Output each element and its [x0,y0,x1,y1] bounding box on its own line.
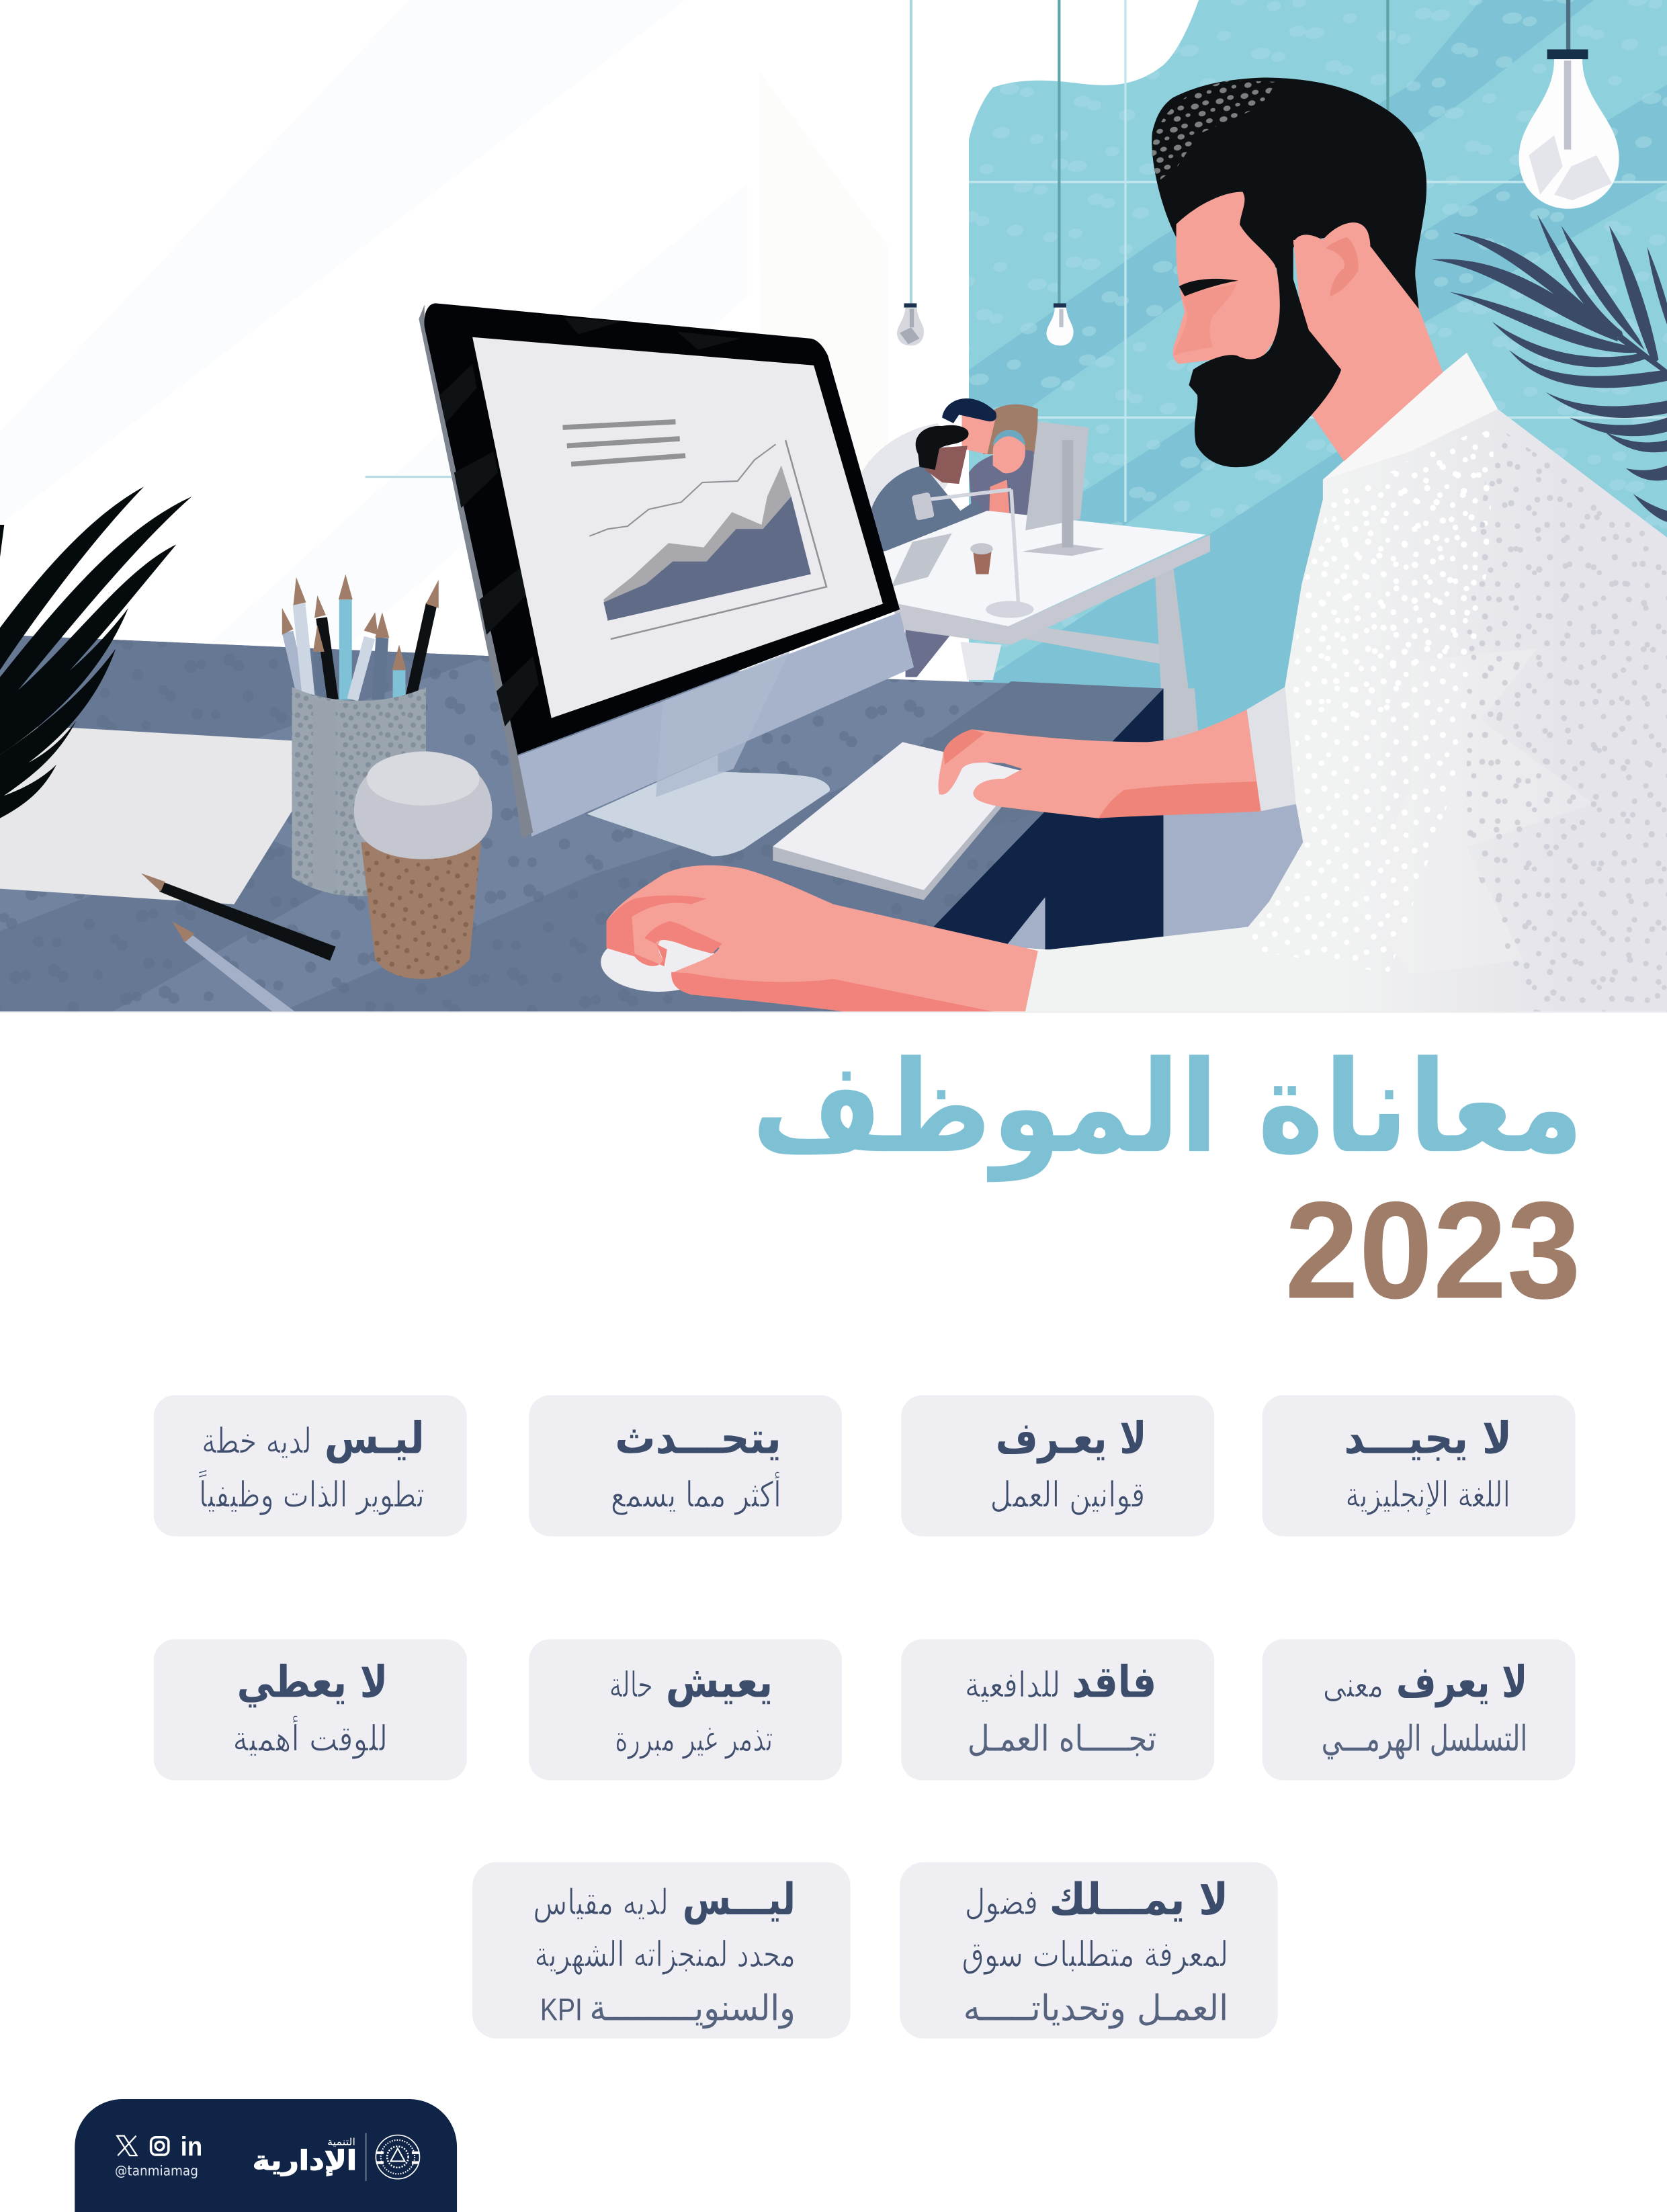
card: English [1263,1395,1576,1536]
card: curiosity: لمعرفة متطلبات سوق [962,1934,1228,1975]
shirt grey dots second layer [1467,423,1667,1011]
card: motivation: فاقد [1072,1658,1156,1708]
pencil grey blue [288,632,303,699]
paper [0,726,292,904]
monitor frame sheen [440,317,740,726]
table right leg [1155,567,1195,739]
icon: Instagram [151,2137,169,2155]
neck [1293,240,1443,462]
pencil black two [411,604,431,699]
wall window grid [969,0,1667,522]
light leg [1006,897,1045,949]
title: معاناة الموظف [752,1033,1584,1183]
small monitor [1025,422,1088,530]
card: no plan [154,1395,467,1536]
shirt [1025,353,1667,1011]
monitor chin glare [656,652,789,797]
card: no plan: تطوير الذات وظيفياً [198,1470,425,1515]
card: labor laws [901,1395,1214,1536]
woman head [993,435,1025,473]
chart heading lines [562,422,685,464]
woman body [969,450,1034,536]
monitor side edge [419,304,533,839]
card: KPI: لديه مقياس [533,1882,669,1923]
grey pencil on desk [172,921,295,1011]
cord three [1387,0,1388,113]
small lamp white [1046,303,1074,345]
pencil pale [299,604,309,699]
card: talks more: يتحـــدث [615,1413,781,1463]
thigh light blue [1164,804,1303,939]
table cross bar [1025,626,1164,665]
right plant [1431,214,1667,522]
card: no plan: ليـس [325,1413,425,1463]
logo divider [366,2133,367,2181]
table top [884,511,1206,626]
icon: X [117,2136,137,2156]
wall shadow bands [969,0,1667,635]
coffee lid top [367,752,480,806]
main desk [0,635,1164,1011]
beard [1189,232,1341,467]
left plant fronds [0,486,144,670]
desk dots [0,635,1164,1011]
pencil black [322,618,333,699]
card: KPI: ليـــس [683,1875,796,1925]
card: KPI: محدد لمنجزاته الشهرية [535,1934,796,1975]
chart back area [603,466,792,621]
card: complaints: يعيش [666,1658,773,1708]
upper hand shade [943,729,984,765]
man body [869,466,983,552]
coffee cup [354,751,493,979]
card: time: لا يعطي [237,1658,388,1708]
card: motivation [901,1640,1214,1781]
lower arm and hand [607,865,1038,1011]
card: motivation: للدافعية [965,1665,1060,1706]
card: KPI: والسنويـــــــــة [589,1988,796,2029]
back table leg foot [1164,689,1199,739]
black pencil on desk [141,874,336,961]
monitor chin [517,612,914,837]
coffee lid [354,751,493,859]
year: 2023 [1285,1173,1581,1328]
card: English: لا يجيـــد [1344,1413,1512,1463]
monitor screen [472,337,883,718]
lower finger shade [607,896,722,966]
scene bottom line [0,1011,1667,1013]
lower mouse [601,933,716,992]
man head [925,445,968,484]
small coffee [970,543,993,574]
chart front area [603,497,811,621]
footer bar [75,2099,457,2212]
large lamp [1519,0,1619,209]
faint diagonal light bands [0,0,747,642]
hair [1152,77,1426,309]
desk lamp [911,490,1034,618]
card: hierarchy [1263,1640,1576,1781]
woman hair [982,405,1038,454]
shirt collar [1323,353,1498,480]
logo main word: الإدارية [253,2145,357,2176]
pencil slate [318,652,323,699]
face [1173,192,1282,364]
small monitor pole [1062,440,1073,548]
right plant fronds [1431,259,1618,341]
card: English: اللغة الإنجليزية [1345,1474,1510,1515]
card: labor laws: لا يعـرف [996,1413,1146,1463]
small lamp grey [897,303,924,345]
hair grey dots [1152,81,1277,181]
illustration: hero scene [0,0,1667,1012]
eye shadow [1173,284,1237,355]
card: KPI: KPI [540,1992,583,2027]
shirt leaf shades [1354,649,1594,974]
card: time [154,1640,467,1781]
desk flat right area [916,681,1164,833]
card: talks more [529,1395,842,1536]
second person face [962,412,996,454]
navy leg area [929,689,1164,949]
keyboard [773,742,1025,900]
shirt white dots [1241,423,1495,974]
chart line [589,444,775,536]
table legs back [906,629,951,677]
pencil blue [343,599,349,699]
back desk scene [856,398,1210,739]
lower hand shade [671,972,993,1011]
pencils in cup [288,599,431,699]
card: no plan: لديه خطة [202,1420,312,1461]
card: hierarchy: لا يعرف [1396,1658,1527,1708]
woman arm [988,480,1011,536]
card: hierarchy: التسلسل الهرمـــي [1322,1718,1527,1759]
card: motivation: تجـــــاه العمـل [968,1718,1156,1759]
shirt white dots second layer [1319,430,1488,734]
monitor frame [424,303,900,755]
blue wall [969,0,1667,748]
card: curiosity: العمـل وتحدياتـــــه [964,1988,1228,2029]
laptop [892,534,952,587]
card: complaints: تذمر غير مبررة [615,1718,773,1759]
shirt cuff [1247,687,1296,811]
wall guide line [366,476,452,478]
desk shadow bands [0,635,1164,1011]
card: complaints: حالة [609,1665,653,1706]
logo small word: التنمية [327,2136,355,2147]
card: KPI [472,1862,851,2039]
wall lower flat band [973,448,1410,748]
card: time: للوقت أهمية [232,1715,388,1759]
second person hair [942,398,996,423]
logo emblem [376,2135,419,2179]
faint back window [759,71,888,472]
card: complaints [529,1640,842,1781]
left plant [0,486,191,818]
hanging cords [910,0,912,304]
card: curiosity: لا يمـــلك [1050,1875,1228,1925]
monitor stand base [587,755,830,856]
chair [856,423,959,557]
chart axis [611,440,826,639]
pencil pale two [353,638,370,699]
pencil slate two [378,638,382,699]
screen chart [562,422,826,639]
card: labor laws: قوانين العمل [990,1474,1145,1515]
small monitor stand [1023,440,1105,556]
cord two [1058,0,1060,304]
card: hierarchy: معنى [1323,1665,1383,1706]
man hair [916,425,969,470]
pencil blue short [396,670,402,699]
wall dots [969,0,1667,748]
table left legs [960,642,1001,680]
ear inner [1326,237,1359,296]
upper forearm [939,710,1260,818]
upper forearm shade [1099,781,1260,818]
table edge [892,535,1210,644]
coffee texture [361,842,481,979]
coffee body [361,842,481,979]
woman headband [993,430,1025,445]
shirt grey dots [1467,423,1667,1011]
eye [1179,279,1238,296]
ear [1293,222,1370,297]
pencil tips [282,574,439,670]
pencil cup [292,687,426,896]
card: curiosity [900,1862,1278,2039]
handle: @tanmiamag [115,2162,198,2178]
icon: LinkedIn: in [181,2132,202,2162]
card: talks more: أكثر مما يسمع [611,1471,781,1515]
card: curiosity: فضول [965,1882,1038,1923]
